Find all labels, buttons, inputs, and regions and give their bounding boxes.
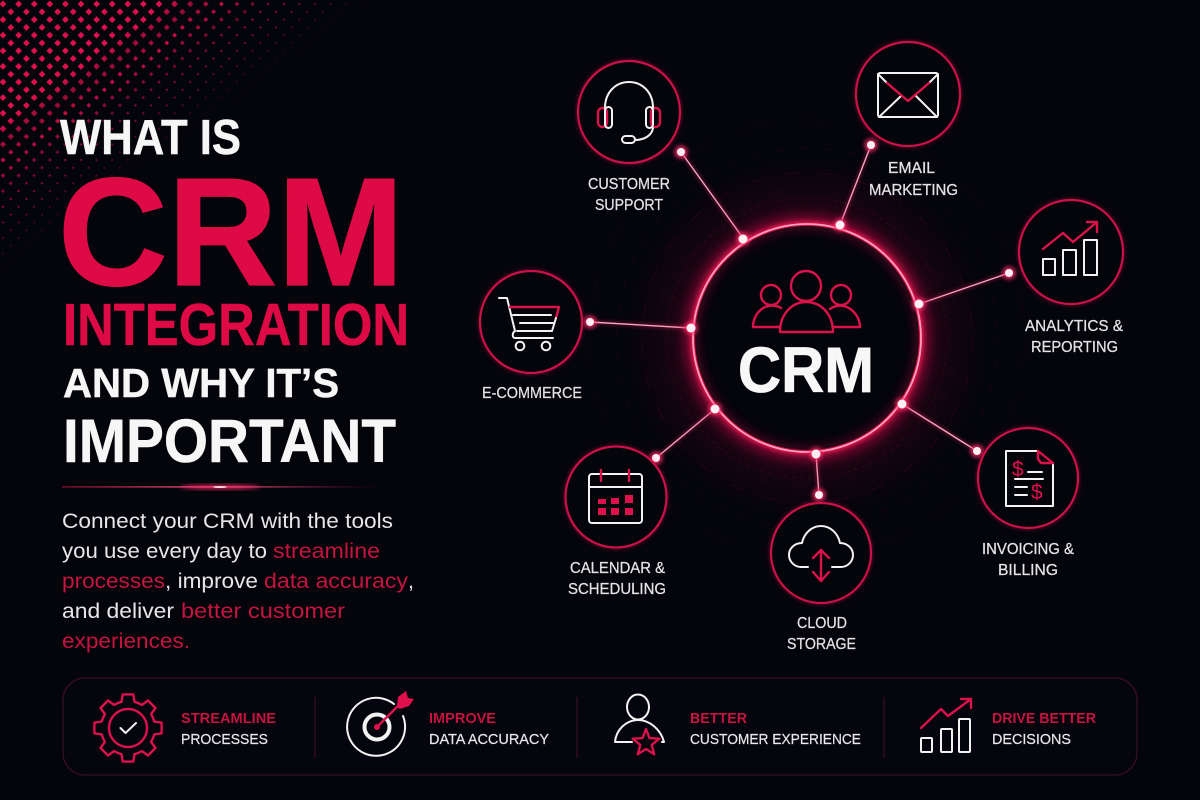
icon: gear with check: [94, 694, 162, 762]
connector lines: [590, 145, 1009, 495]
description paragraph: you use every day to: [62, 539, 267, 563]
icon: headset: [598, 82, 660, 143]
text: streamline processes: [181, 710, 276, 748]
text: better customer experience: [690, 710, 861, 748]
label: email marketing: MARKETING: [869, 182, 958, 199]
text: drive better decisions: [992, 710, 1096, 748]
icon: cloud with arrows: [789, 526, 853, 581]
description paragraph: streamline: [273, 539, 380, 563]
node: calendar and scheduling: [566, 446, 666, 598]
divider glow line: [62, 485, 380, 489]
benefit: streamline processes: [94, 694, 276, 762]
label: calendar and scheduling: CALENDAR &: [570, 560, 666, 577]
hub label: CRM: [738, 334, 874, 406]
description paragraph: , improve: [165, 569, 258, 593]
text: improve data accuracy: [429, 710, 549, 748]
label: analytics and reporting: [1025, 318, 1124, 356]
text: improve data accuracy: DATA ACCURACY: [429, 731, 549, 748]
title line: integration: INTEGRATION: [63, 292, 409, 358]
label: invoicing and billing: INVOICING &: [982, 541, 1075, 558]
node: invoicing and billing: [978, 428, 1078, 579]
label: invoicing and billing: BILLING: [998, 562, 1058, 579]
icon: bar chart with arrow: [1043, 222, 1097, 275]
title: [58, 111, 409, 475]
label: calendar and scheduling: SCHEDULING: [568, 581, 666, 598]
description paragraph: better customer: [181, 599, 345, 623]
label: cloud storage: [787, 615, 856, 653]
text: drive better decisions: DRIVE BETTER: [992, 710, 1096, 727]
label: calendar and scheduling: [568, 560, 666, 598]
connector nodes: [584, 138, 1016, 502]
node: e-commerce: [480, 271, 582, 402]
text: streamline processes: PROCESSES: [181, 731, 268, 748]
icon: target with arrow: [347, 691, 414, 756]
halftone dot pattern: [0, 0, 362, 270]
label: email marketing: EMAIL: [888, 160, 935, 177]
icon: invoice document: $: [1031, 481, 1043, 504]
icon: envelope: [878, 73, 938, 117]
label: cloud storage: STORAGE: [787, 636, 856, 653]
title line: what is: WHAT IS: [60, 111, 241, 165]
text: improve data accuracy: IMPROVE: [429, 710, 496, 727]
label: analytics and reporting: REPORTING: [1031, 339, 1118, 356]
label: customer support: CUSTOMER: [588, 176, 670, 193]
description paragraph: data accuracy: [264, 569, 408, 593]
icon: people group: [753, 271, 860, 332]
icon: invoice document: $: [1012, 458, 1024, 481]
panel: benefits bar: [63, 678, 1137, 775]
title line: CRM: CRM: [58, 146, 404, 318]
label: analytics and reporting: ANALYTICS &: [1025, 318, 1124, 335]
label: invoicing and billing: [982, 541, 1075, 579]
node: email marketing: [856, 42, 960, 199]
benefit: better customer experience: [615, 694, 861, 754]
benefit: improve data accuracy: [347, 691, 549, 756]
label: customer support: SUPPORT: [595, 197, 663, 214]
icon: shopping cart: [499, 298, 559, 350]
node: analytics and reporting: [1019, 200, 1124, 356]
label: e-commerce: E-COMMERCE: [482, 385, 582, 402]
description paragraph: ,: [408, 569, 414, 593]
description paragraph: Connect your CRM with the tools: [62, 509, 393, 533]
node: customer support: [578, 61, 680, 214]
icon: growth chart: [921, 699, 971, 752]
text: better customer experience: BETTER: [690, 710, 747, 727]
title line: and why it's: AND WHY IT’S: [63, 360, 339, 406]
benefit: drive better decisions: [921, 699, 1096, 752]
faint background rings: [589, 120, 1025, 556]
text: better customer experience: CUSTOMER EXPERIENCE: [690, 731, 861, 748]
icon: calendar: [589, 470, 642, 523]
description paragraph: processes: [62, 569, 165, 593]
description paragraph: and deliver: [62, 599, 174, 623]
node: cloud storage: [771, 503, 871, 653]
label: email marketing: [869, 160, 958, 199]
icon: user with star: [615, 694, 664, 754]
text: streamline processes: STREAMLINE: [181, 710, 276, 727]
title line: important: IMPORTANT: [63, 407, 396, 475]
central CRM hub: [627, 158, 987, 518]
icon: invoice document: [1006, 451, 1053, 506]
label: customer support: [588, 176, 670, 214]
description paragraph: experiences.: [62, 629, 190, 653]
text: drive better decisions: DECISIONS: [992, 731, 1071, 748]
label: cloud storage: CLOUD: [797, 615, 847, 632]
description paragraph: [62, 509, 414, 653]
